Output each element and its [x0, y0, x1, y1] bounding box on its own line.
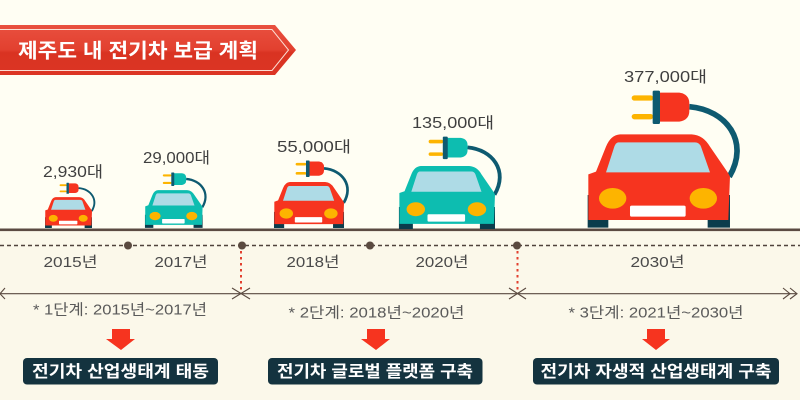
stage 2 period: * 2단계: 2018년~2020년	[288, 304, 464, 322]
stage 3 period: * 3단계: 2021년~2030년	[568, 304, 744, 322]
goal box: stage 2: 전기차 글로벌 플랫폼 구축	[277, 362, 473, 381]
car 2030: large red electric car	[588, 91, 737, 228]
year labels: 2015년	[44, 254, 98, 271]
car 2017: teal electric car	[145, 172, 205, 228]
car 2015: red electric car	[45, 183, 94, 228]
label: 135,000 vehicles: 135,000대	[412, 114, 494, 132]
arrow: stage 3	[642, 329, 670, 350]
red dotted stage dividers	[241, 251, 518, 293]
timeline: dashed line with dots	[0, 242, 800, 250]
year labels	[44, 254, 684, 271]
title banner: 제주도 내 전기차 보급 계획	[18, 40, 258, 62]
label: 2,930 vehicles: 2,930대	[43, 163, 103, 181]
year labels: 2017년	[154, 254, 208, 271]
car 2020: teal electric car	[399, 137, 500, 229]
goal box: stage 3	[533, 358, 779, 384]
label: 377,000 vehicles: 377,000대	[624, 68, 707, 86]
car 2018: red electric car	[274, 161, 347, 228]
label: 29,000 vehicles: 29,000대	[143, 149, 210, 167]
year labels: 2020년	[416, 254, 468, 271]
goal box: stage 3: 전기차 자생적 산업생태계 구축	[540, 362, 772, 381]
arrow: stage 2	[361, 329, 390, 350]
goal box: stage 2	[268, 358, 482, 384]
title banner	[0, 25, 296, 75]
ground line	[0, 228, 800, 231]
year labels: 2018년	[286, 254, 340, 271]
goal box: stage 1	[23, 358, 218, 384]
arrow: stage 1	[106, 329, 135, 350]
goal box: stage 1: 전기차 산업생태계 태동	[32, 362, 209, 381]
stage 1 period: * 1단계: 2015년~2017년	[33, 302, 207, 318]
year labels: 2030년	[630, 254, 684, 271]
stage range arrows	[0, 288, 797, 299]
label: 55,000 vehicles: 55,000대	[277, 138, 351, 156]
